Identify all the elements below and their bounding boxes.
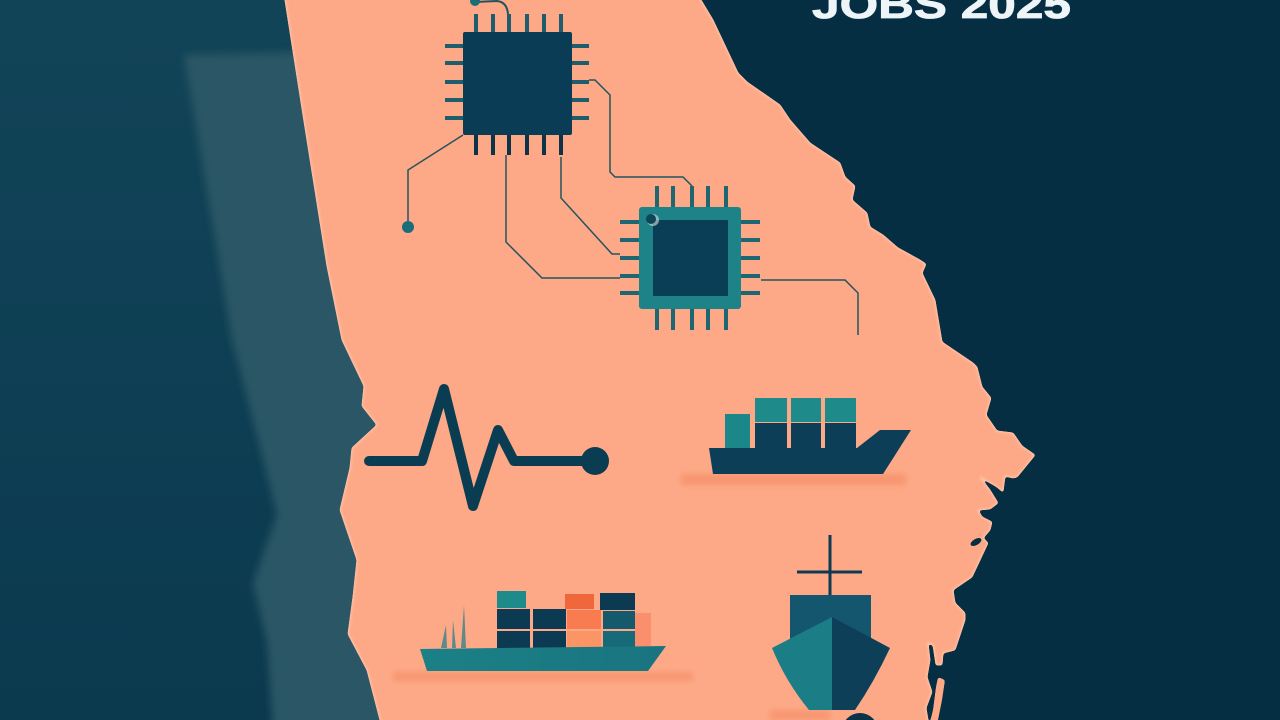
chip: large dark processor (445, 14, 589, 155)
map shadow band (184, 52, 420, 720)
icon: cargo ship lower left (393, 591, 693, 681)
icon: heartbeat line (369, 389, 609, 506)
trace end dots (402, 0, 480, 233)
icon: ship bow view (770, 535, 890, 720)
circuit traces (408, 1, 858, 335)
state map of Georgia (283, 0, 1035, 720)
chip: teal processor (620, 186, 760, 330)
estuary hole (969, 536, 983, 548)
icon: container ship upper right (681, 398, 911, 485)
